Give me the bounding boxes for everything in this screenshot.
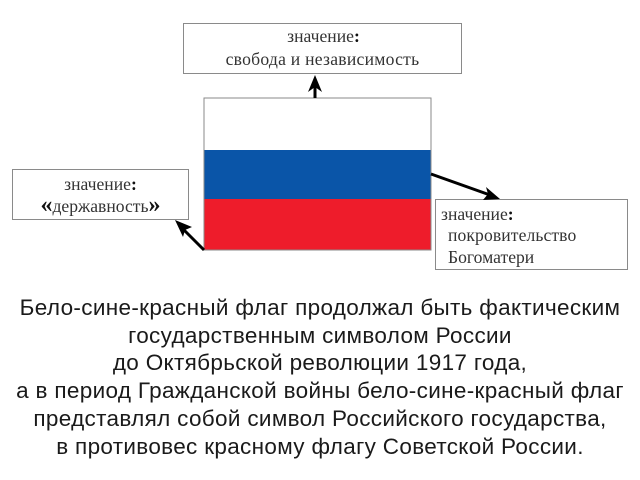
box: freedom and independence: свобода и независимость (226, 49, 419, 69)
box: patronage of the Mother of God (435, 199, 628, 270)
main text (16, 295, 624, 459)
main text: государственным символом России (128, 323, 512, 348)
main text: представлял собой символ Российского государства, (33, 406, 607, 431)
box: freedom and independence: значение: (287, 26, 360, 46)
box: patronage of the Mother of God: значение: (441, 204, 514, 224)
box: statehood: значение: (64, 174, 137, 194)
box: statehood: «державность» (40, 192, 160, 218)
arrow: right (431, 174, 500, 200)
main text: в противовес красному флагу Советской России. (56, 434, 584, 459)
box: statehood (12, 169, 189, 220)
box: patronage of the Mother of God: покровительство (448, 225, 576, 245)
main text: до Октябрьской революции 1917 года, (113, 350, 527, 375)
main text: а в период Гражданской войны бело-сине-красный флаг (16, 378, 624, 403)
box: patronage of the Mother of God: Богоматери (448, 247, 534, 267)
arrow: left (175, 220, 204, 250)
main text: Бело-сине-красный флаг продолжал быть фактическим (20, 295, 620, 320)
box: freedom and independence (183, 23, 462, 74)
arrow: up (308, 75, 322, 98)
